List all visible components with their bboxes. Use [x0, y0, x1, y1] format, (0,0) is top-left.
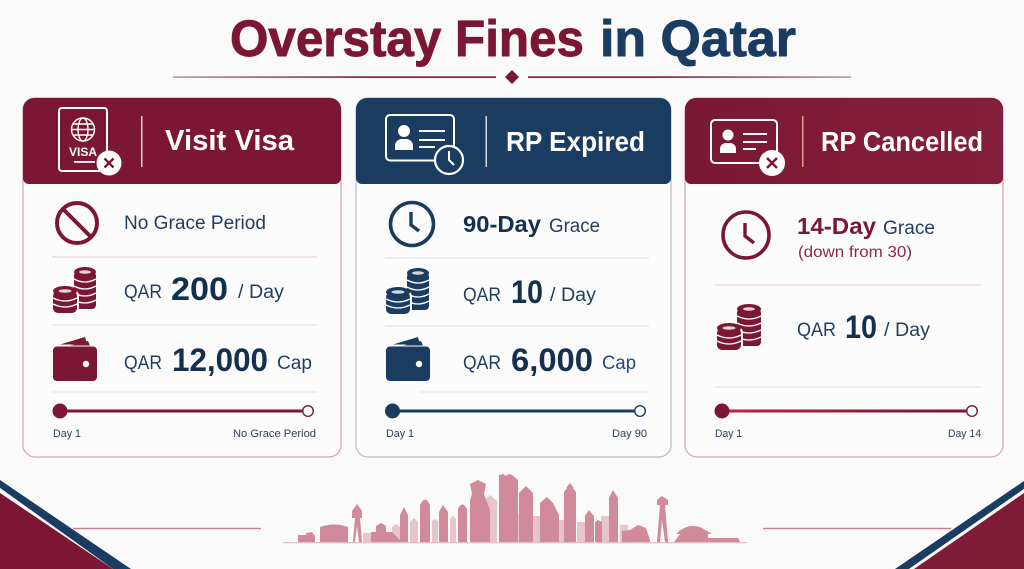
- row: fine cap: QAR: [463, 353, 501, 374]
- row: daily fine: 200: [171, 271, 228, 307]
- row: fine cap: QAR: [124, 353, 162, 374]
- icon: id card with x: [711, 120, 785, 176]
- faint background towers: [363, 495, 628, 542]
- row: daily fine: 10: [845, 309, 877, 345]
- icon: coins: [716, 304, 761, 352]
- header: visit visa: [23, 98, 341, 184]
- row: 14-day grace: (down from 30): [798, 244, 912, 261]
- title: Overstay Fines: [230, 10, 584, 67]
- timeline: 14 days: Day 1: [715, 428, 742, 440]
- row: daily fine: QAR: [797, 320, 836, 341]
- timeline: no grace: Day 1: [53, 428, 81, 440]
- footer line right: [763, 528, 951, 529]
- icon: wallet: [53, 337, 97, 381]
- title underline with diamond: [173, 70, 851, 84]
- title: [230, 10, 796, 67]
- icon: clock: [390, 202, 434, 246]
- header: rp cancelled: [685, 98, 1003, 184]
- icon: wallet: [386, 337, 430, 381]
- panel: visit visa: [23, 98, 341, 457]
- row: no grace period: [57, 203, 266, 243]
- icon: passport with x: [59, 108, 122, 176]
- row: fine cap: Cap: [602, 353, 636, 374]
- footer line left: [73, 528, 261, 529]
- row: daily fine: QAR: [124, 282, 162, 303]
- ground line: [283, 542, 747, 543]
- panel: rp cancelled: [685, 98, 1003, 457]
- row: daily fine: [52, 267, 285, 315]
- timeline: 90 days: Day 90: [612, 428, 647, 440]
- icon: clock: [723, 212, 769, 258]
- row: 14-day grace: Grace: [883, 218, 935, 239]
- skyline: [283, 474, 747, 543]
- row: fine cap: [386, 337, 636, 381]
- row: fine cap: 6,000: [511, 342, 593, 378]
- timeline: no grace: No Grace Period: [233, 428, 316, 440]
- row: 14-day grace: 14-Day: [797, 213, 876, 239]
- header: rp expired: RP Expired: [506, 126, 645, 157]
- icon: prohibited: [57, 203, 97, 243]
- title: in Qatar: [600, 10, 796, 67]
- timeline: no grace: [52, 404, 316, 440]
- corner: right: [895, 481, 1024, 569]
- row: 90-day grace: [390, 202, 600, 246]
- row: daily fine: [716, 304, 931, 352]
- row: fine cap: Cap: [277, 353, 312, 374]
- corner: left: [0, 480, 131, 569]
- header: visit visa: Visit Visa: [165, 125, 295, 157]
- row: daily fine: / Day: [884, 320, 931, 341]
- header: rp cancelled: RP Cancelled: [821, 126, 983, 157]
- main towers: [298, 474, 740, 542]
- icon: id card with clock: [386, 115, 463, 174]
- timeline: 90 days: [385, 404, 647, 440]
- row: daily fine: / Day: [550, 285, 597, 306]
- icon: passport with x: VISA: [69, 147, 97, 159]
- icon: coins: [385, 268, 429, 316]
- row: daily fine: QAR: [463, 285, 501, 306]
- timeline: 14 days: [714, 404, 981, 440]
- row: fine cap: 12,000: [172, 342, 268, 378]
- timeline: 90 days: Day 1: [386, 428, 414, 440]
- timeline: 14 days: Day 14: [948, 428, 981, 440]
- row: daily fine: [385, 268, 597, 316]
- header: rp expired: [356, 98, 671, 184]
- row: 90-day grace: 90-Day: [463, 211, 541, 237]
- panel: rp expired: [356, 98, 671, 457]
- row: no grace period: No Grace Period: [124, 213, 266, 234]
- icon: coins: [52, 267, 96, 315]
- row: fine cap: [53, 337, 312, 381]
- row: daily fine: 10: [511, 274, 543, 310]
- row: 14-day grace: [723, 212, 935, 261]
- row: daily fine: / Day: [238, 282, 285, 303]
- row: 90-day grace: Grace: [549, 216, 600, 237]
